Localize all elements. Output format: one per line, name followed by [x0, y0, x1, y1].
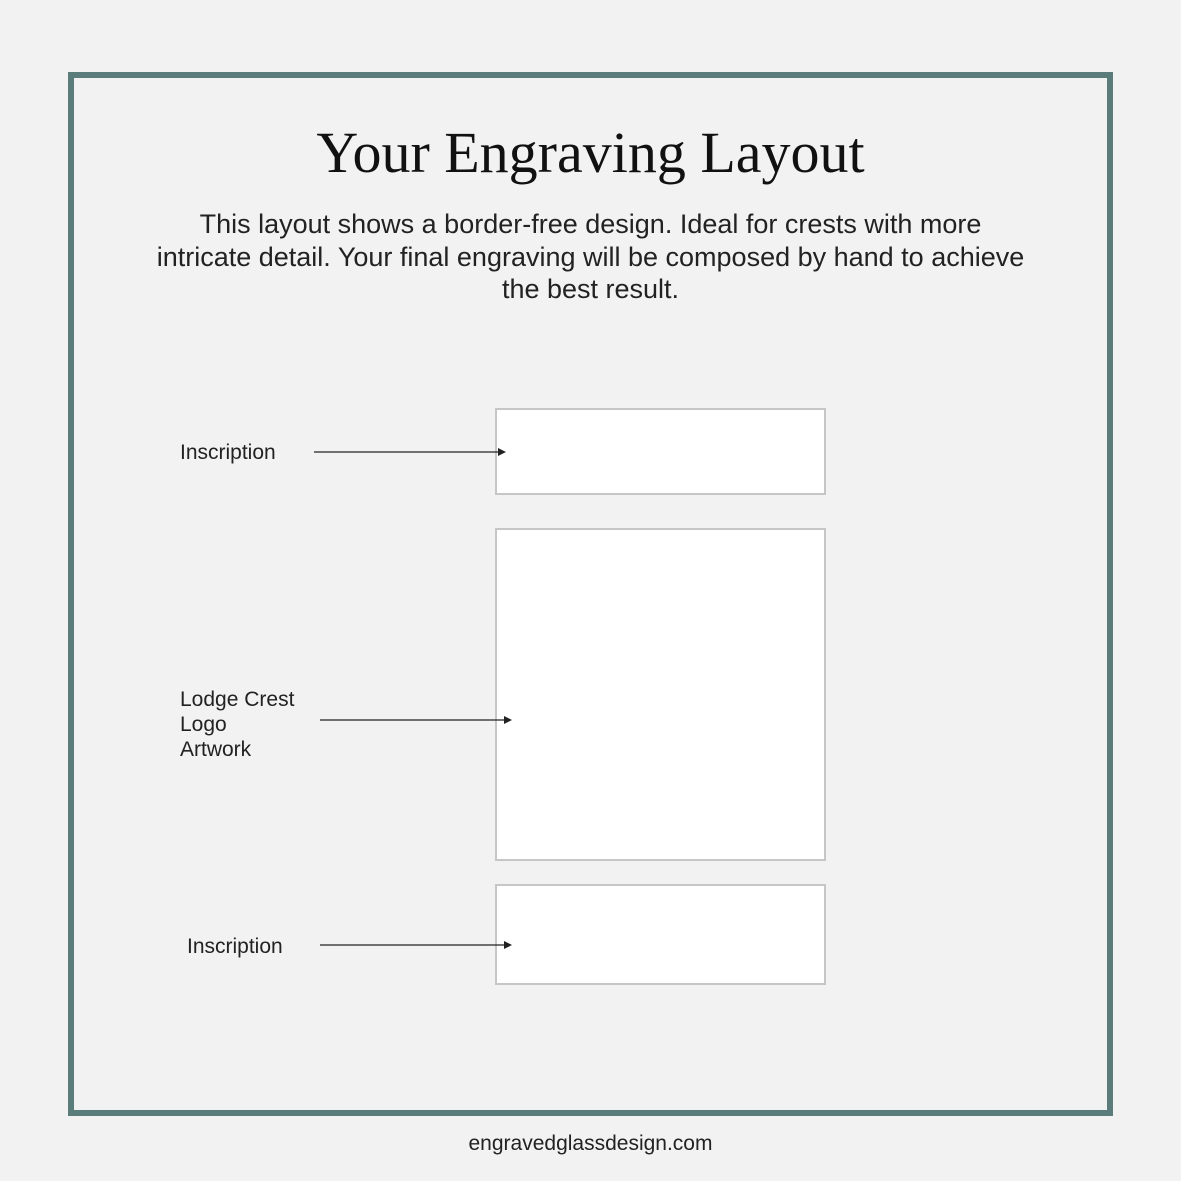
title: Your Engraving Layout — [316, 120, 865, 185]
label: crest: Artwork — [180, 738, 251, 761]
subtitle: the best result. — [502, 274, 679, 304]
label: crest — [180, 688, 294, 761]
label: crest: Logo — [180, 713, 227, 736]
label: inscription top: Inscription — [180, 441, 276, 464]
box: bottom inscription — [495, 884, 826, 985]
label: crest: Lodge Crest — [180, 688, 294, 711]
frame — [68, 72, 1113, 1116]
subtitle: This layout shows a border-free design. Ideal for crests with more — [200, 209, 981, 239]
box: top inscription — [495, 408, 826, 495]
subtitle — [157, 209, 1024, 304]
label: inscription bottom: Inscription — [187, 935, 283, 958]
subtitle: intricate detail. Your final engraving will be composed by hand to achieve — [157, 242, 1024, 272]
box: crest — [495, 528, 826, 861]
footer: engravedglassdesign.com — [468, 1132, 712, 1155]
